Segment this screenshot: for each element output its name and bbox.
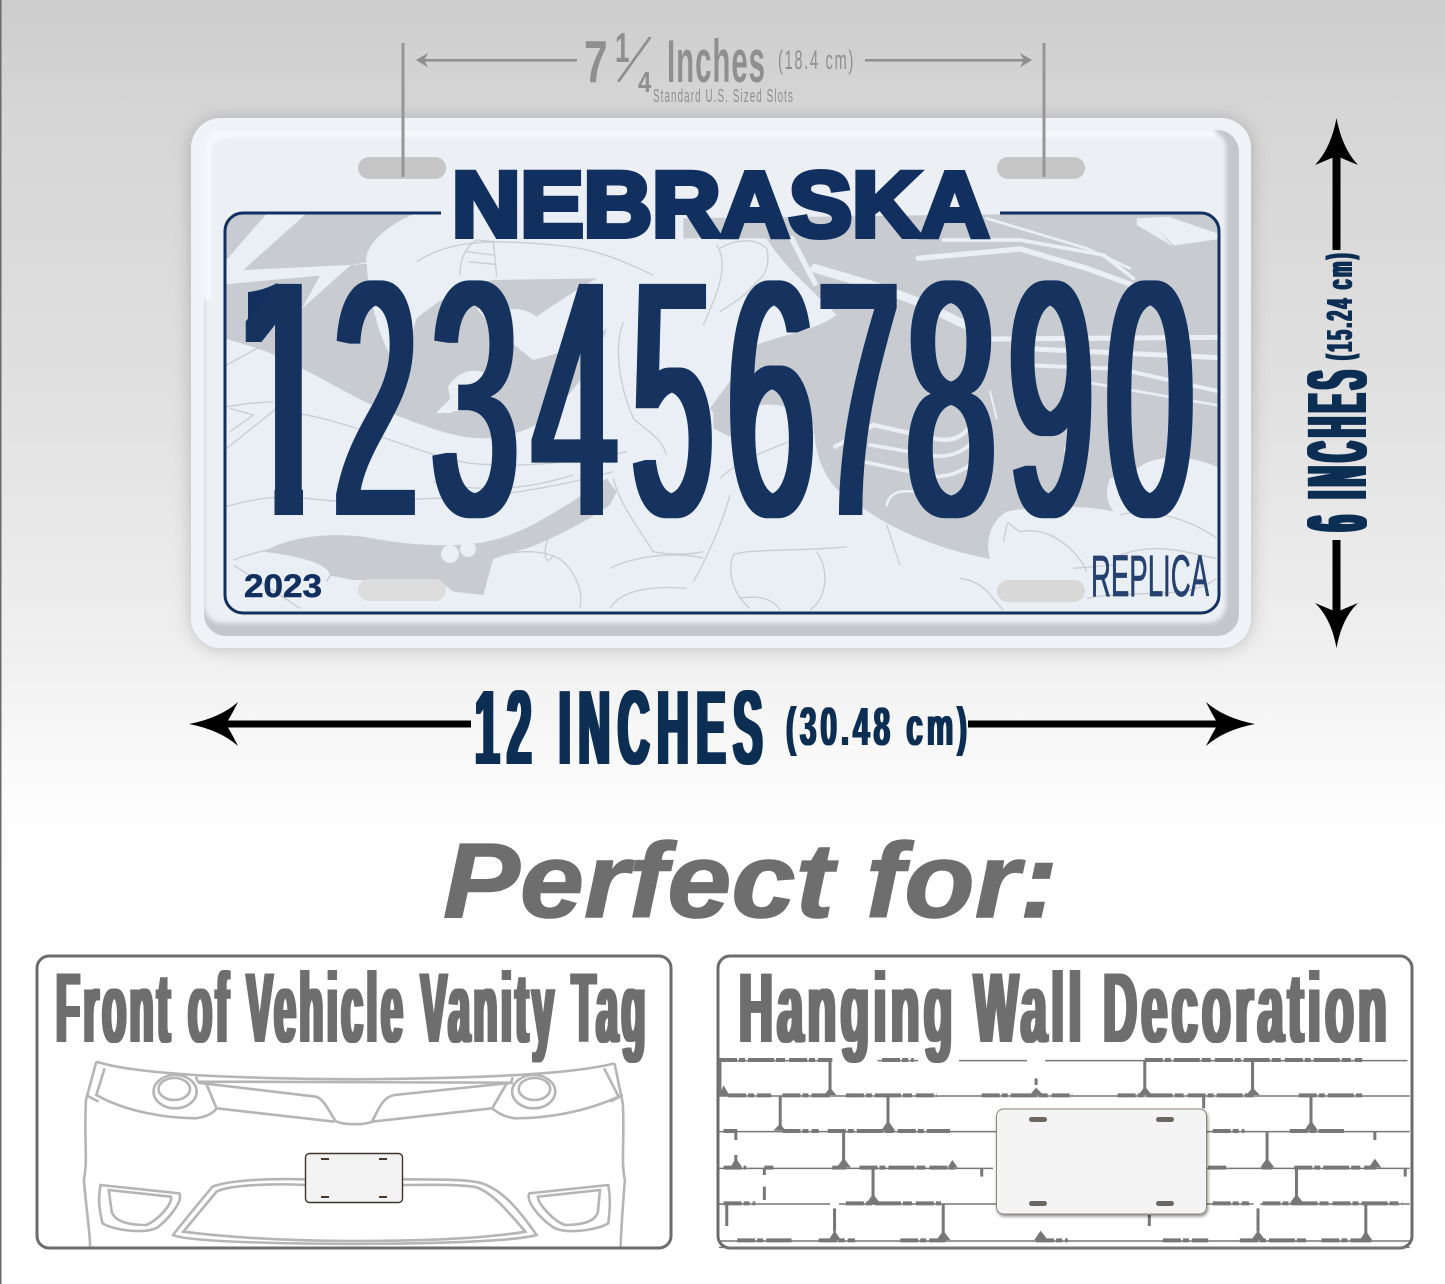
panel: front of vehicle — [37, 952, 671, 1248]
plate border frame — [225, 213, 1219, 613]
label: 30.48 cm: (30.48 cm) — [786, 697, 971, 757]
small plate on car — [306, 1154, 402, 1202]
planet shape — [436, 370, 484, 413]
label: 7 1/4 Inches: 7 — [584, 28, 608, 95]
plate number: 3 — [431, 212, 518, 587]
plate number: 6 — [727, 212, 815, 587]
license plate: 0 — [1106, 212, 1194, 587]
plate number: 4 — [533, 212, 617, 587]
plate number: 9 — [1009, 212, 1094, 587]
slot measure lines — [402, 43, 1046, 177]
width dimension — [189, 669, 1255, 787]
year: 2023 — [244, 568, 322, 604]
car outline — [84, 1062, 625, 1247]
license plate — [191, 118, 1251, 648]
height dimension — [1290, 118, 1384, 648]
label: 7 1/4 Inches: 4 — [638, 66, 651, 99]
plate number: 2 — [334, 212, 418, 587]
plate number: 1 — [233, 212, 338, 587]
label: 7 1/4 Inches: Inches — [667, 28, 766, 95]
plate number: 7 — [818, 212, 899, 587]
label: standard slots: Standard U.S. Sized Slots — [653, 86, 794, 106]
label: 7 1/4 Inches — [584, 25, 855, 99]
plate number: 5 — [632, 212, 713, 587]
brick wall — [719, 1060, 1410, 1247]
fine line drawing — [227, 240, 1217, 610]
height dimension: (15.24 cm) — [1319, 251, 1360, 360]
panel: wall decoration — [718, 952, 1412, 1248]
license plate: REPLICA — [1091, 544, 1209, 609]
mounting slots — [358, 157, 1085, 602]
height dimension: 6 INCHES — [1290, 366, 1384, 531]
plate number — [246, 280, 1193, 518]
plate artwork — [224, 212, 1220, 616]
label: 7 1/4 Inches: (18.4 cm) — [778, 45, 855, 75]
plate number: 8 — [906, 212, 996, 587]
width dimension: 12 INCHES — [475, 669, 770, 787]
slot spacing dimension — [416, 25, 1032, 106]
label: 7 1/4 Inches: 1 — [615, 25, 629, 72]
small plate on wall — [996, 1109, 1206, 1214]
state name: NEBRASKA — [452, 154, 989, 256]
heading: perfect for: Perfect for: — [443, 822, 1058, 940]
